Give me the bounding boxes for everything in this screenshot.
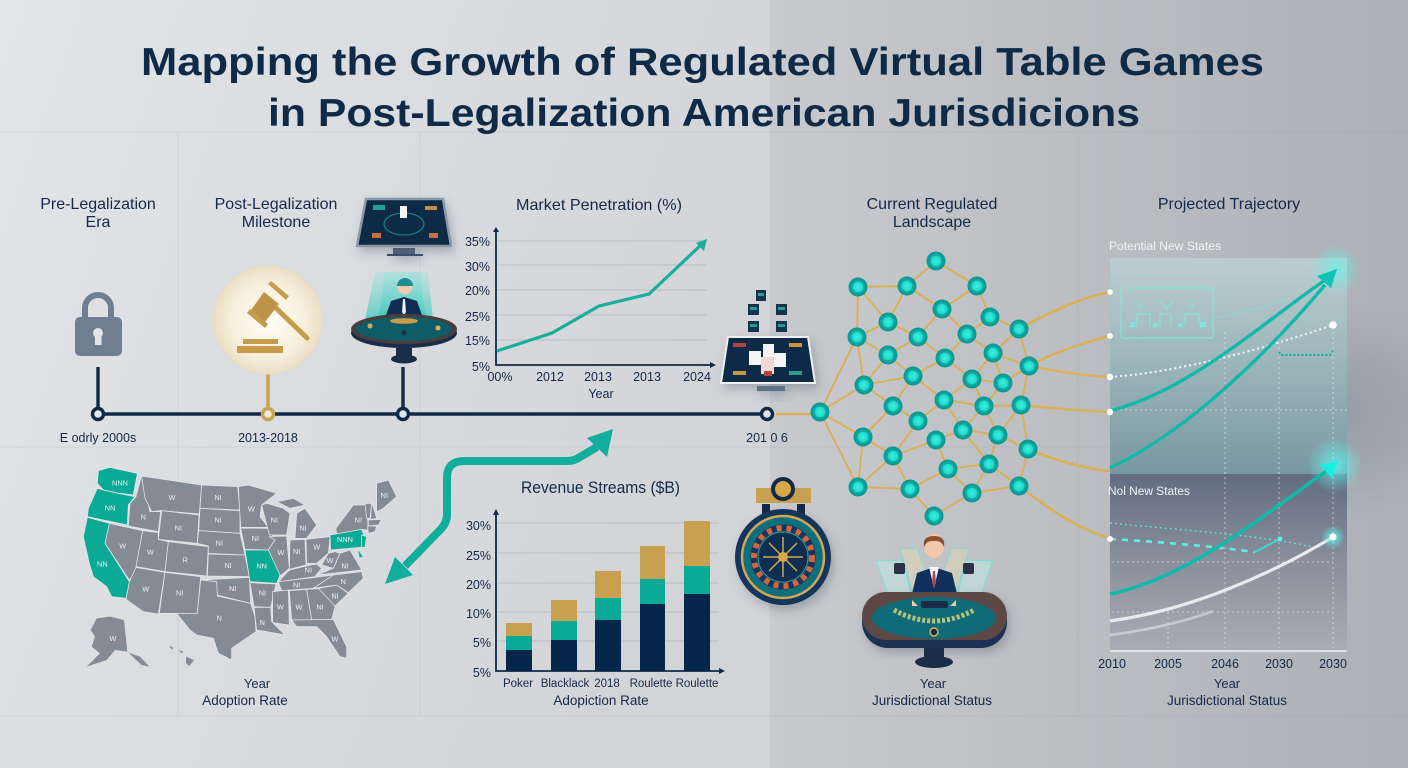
map: US states adoption: W <box>277 603 284 612</box>
map: US states adoption: NI <box>305 565 312 574</box>
chart: revenue streams stacked bars: 5% <box>473 636 491 650</box>
chart: market penetration: 35% <box>465 235 490 249</box>
map: US states adoption: W <box>119 542 126 551</box>
network: connected jurisdictions <box>810 252 1110 538</box>
icon: padlock <box>75 295 122 356</box>
icon: roulette wheel <box>735 479 831 605</box>
chart: market penetration: Year <box>588 387 614 401</box>
chart: projected trajectory <box>1098 241 1363 708</box>
text: center axis caption <box>872 676 992 708</box>
title: in Post-Legalization American Jurisdicions <box>268 92 1140 135</box>
map: US states adoption: W <box>278 548 285 557</box>
map: US states adoption: W <box>327 556 334 565</box>
title: Mapping the Growth of Regulated Virtual Table Games <box>141 41 1264 84</box>
map: US states adoption: N <box>341 577 346 586</box>
heading: post-legalization milestone: Milestone <box>242 214 310 231</box>
map: US states adoption: W <box>248 504 255 513</box>
icon: dealer at virtual table <box>351 272 457 364</box>
chart: market penetration: 2013 <box>633 370 661 384</box>
chart: revenue streams stacked bars: 30% <box>466 519 491 533</box>
chart: revenue streams stacked bars: 5% <box>473 666 491 680</box>
map: US states adoption: NI <box>299 524 307 533</box>
text: center axis caption: Year <box>920 676 947 691</box>
chart: revenue streams stacked bars: 20% <box>466 578 491 592</box>
chart: revenue streams stacked bars: Revenue Streams ($B) <box>521 478 680 497</box>
icon: gavel in gold circle <box>214 266 322 374</box>
chart: market penetration: 15% <box>465 334 490 348</box>
map: US states adoption: NI <box>316 603 324 612</box>
map: US states adoption: NI <box>175 523 182 532</box>
chart: market penetration: 2024 <box>683 370 711 384</box>
heading: projected trajectory: Projected Trajectory <box>1158 196 1300 213</box>
map: US states adoption: NI <box>214 493 222 502</box>
text: map axis caption: Adoption Rate <box>202 693 288 708</box>
axis labels: 2030 <box>1319 657 1347 671</box>
axis labels <box>1098 657 1347 708</box>
map: US states adoption: NI <box>293 547 300 556</box>
map: US states adoption: R <box>183 555 188 564</box>
map: US states adoption: NI <box>293 580 300 589</box>
map: US states adoption: NI <box>341 561 349 570</box>
chart: revenue streams stacked bars: Poker <box>503 678 533 690</box>
chart: market penetration: 2012 <box>536 370 564 384</box>
chart: market penetration <box>465 197 716 401</box>
map: US states adoption: NNN <box>337 535 353 544</box>
map: US states adoption: NNN <box>112 478 128 487</box>
lower trajectory lines <box>1107 461 1345 635</box>
axis labels: 2005 <box>1154 657 1182 671</box>
chart: revenue streams stacked bars: Adopiction Rate <box>553 693 649 708</box>
heading: post-legalization milestone: Post-Legalization <box>215 196 337 213</box>
chart: revenue streams stacked bars: Roulette <box>630 678 672 690</box>
chart: market penetration: 00% <box>487 370 513 384</box>
icon: card game tablet with floating tiles <box>721 290 815 391</box>
upper trajectory lines <box>1107 269 1337 468</box>
text: center axis caption: Jurisdictional Status <box>872 693 992 708</box>
chart: market penetration: 25% <box>465 310 490 324</box>
title <box>141 41 1264 135</box>
map: US states adoption: N <box>217 613 222 622</box>
arrow: teal double-headed connector <box>385 429 613 584</box>
text: map axis caption <box>202 676 288 708</box>
map: US states adoption: NI <box>271 515 278 524</box>
map: US states adoption: NN <box>256 561 267 570</box>
timeline: 2013-2018 <box>238 431 298 445</box>
chart: market penetration: Market Penetration (%) <box>516 197 682 214</box>
heading: pre-legalization era: Pre-Legalization <box>40 196 156 213</box>
map: US states adoption: W <box>142 584 149 593</box>
map: US states adoption: W <box>110 634 117 643</box>
map: US states adoption: W <box>169 493 176 502</box>
icon: dealer with holographic panels at table <box>862 534 1007 668</box>
icon: holographic mini chart <box>1121 288 1289 338</box>
map: US states adoption: NI <box>229 584 236 593</box>
map: US states adoption: NI <box>214 516 222 525</box>
map: US states adoption: NI <box>224 561 232 570</box>
map: US states adoption: NI <box>381 491 388 500</box>
timeline: 201 0 6 <box>746 431 788 445</box>
chart: revenue streams stacked bars: 2018 <box>594 678 620 690</box>
map: US states adoption: W <box>332 634 339 643</box>
map: US states adoption: W <box>313 543 320 552</box>
map: US states adoption: NI <box>176 589 183 598</box>
map: US states adoption: N <box>141 513 146 522</box>
text: not new states: Nol New States <box>1108 486 1190 498</box>
map: US states adoption: W <box>296 603 303 612</box>
map: US states adoption: NI <box>259 589 266 598</box>
map: US states adoption <box>83 467 397 667</box>
axis labels: Jurisdictional Status <box>1167 693 1287 708</box>
chart: revenue streams stacked bars: 10% <box>466 607 491 621</box>
chart: market penetration: 5% <box>472 360 490 374</box>
map: US states adoption: NI <box>216 538 223 547</box>
axis labels: Year <box>1214 676 1241 691</box>
timeline: E odrly 2000s <box>60 431 136 445</box>
map: US states adoption: NI <box>355 516 362 525</box>
chart: market penetration: 30% <box>465 260 490 274</box>
text: map axis caption: Year <box>244 676 271 691</box>
map: US states adoption: NN <box>105 504 115 513</box>
map: US states adoption: NI <box>331 591 339 600</box>
axis labels: 2030 <box>1265 657 1293 671</box>
chart: revenue streams stacked bars: Blacklack <box>541 678 590 690</box>
chart: market penetration: 20% <box>465 284 490 298</box>
map: US states adoption: W <box>147 548 154 557</box>
chart: market penetration: 2013 <box>584 370 612 384</box>
chart: revenue streams stacked bars <box>466 478 725 708</box>
heading: pre-legalization era: Era <box>86 214 111 231</box>
heading: current regulated landscape: Current Regulated <box>867 196 997 213</box>
text: potential new states: Potential New States <box>1109 241 1221 253</box>
chart: revenue streams stacked bars: 25% <box>466 549 491 563</box>
icon: upper game monitor <box>357 199 451 256</box>
map: US states adoption: NN <box>97 559 108 568</box>
axis labels: 2046 <box>1211 657 1239 671</box>
chart: revenue streams stacked bars: Roulette <box>676 678 718 690</box>
axis labels: 2010 <box>1098 657 1126 671</box>
bars <box>506 521 710 671</box>
timeline <box>60 367 820 445</box>
map: US states adoption: N <box>260 618 265 627</box>
map: US states adoption: NI <box>252 534 259 543</box>
heading: current regulated landscape: Landscape <box>893 214 971 231</box>
